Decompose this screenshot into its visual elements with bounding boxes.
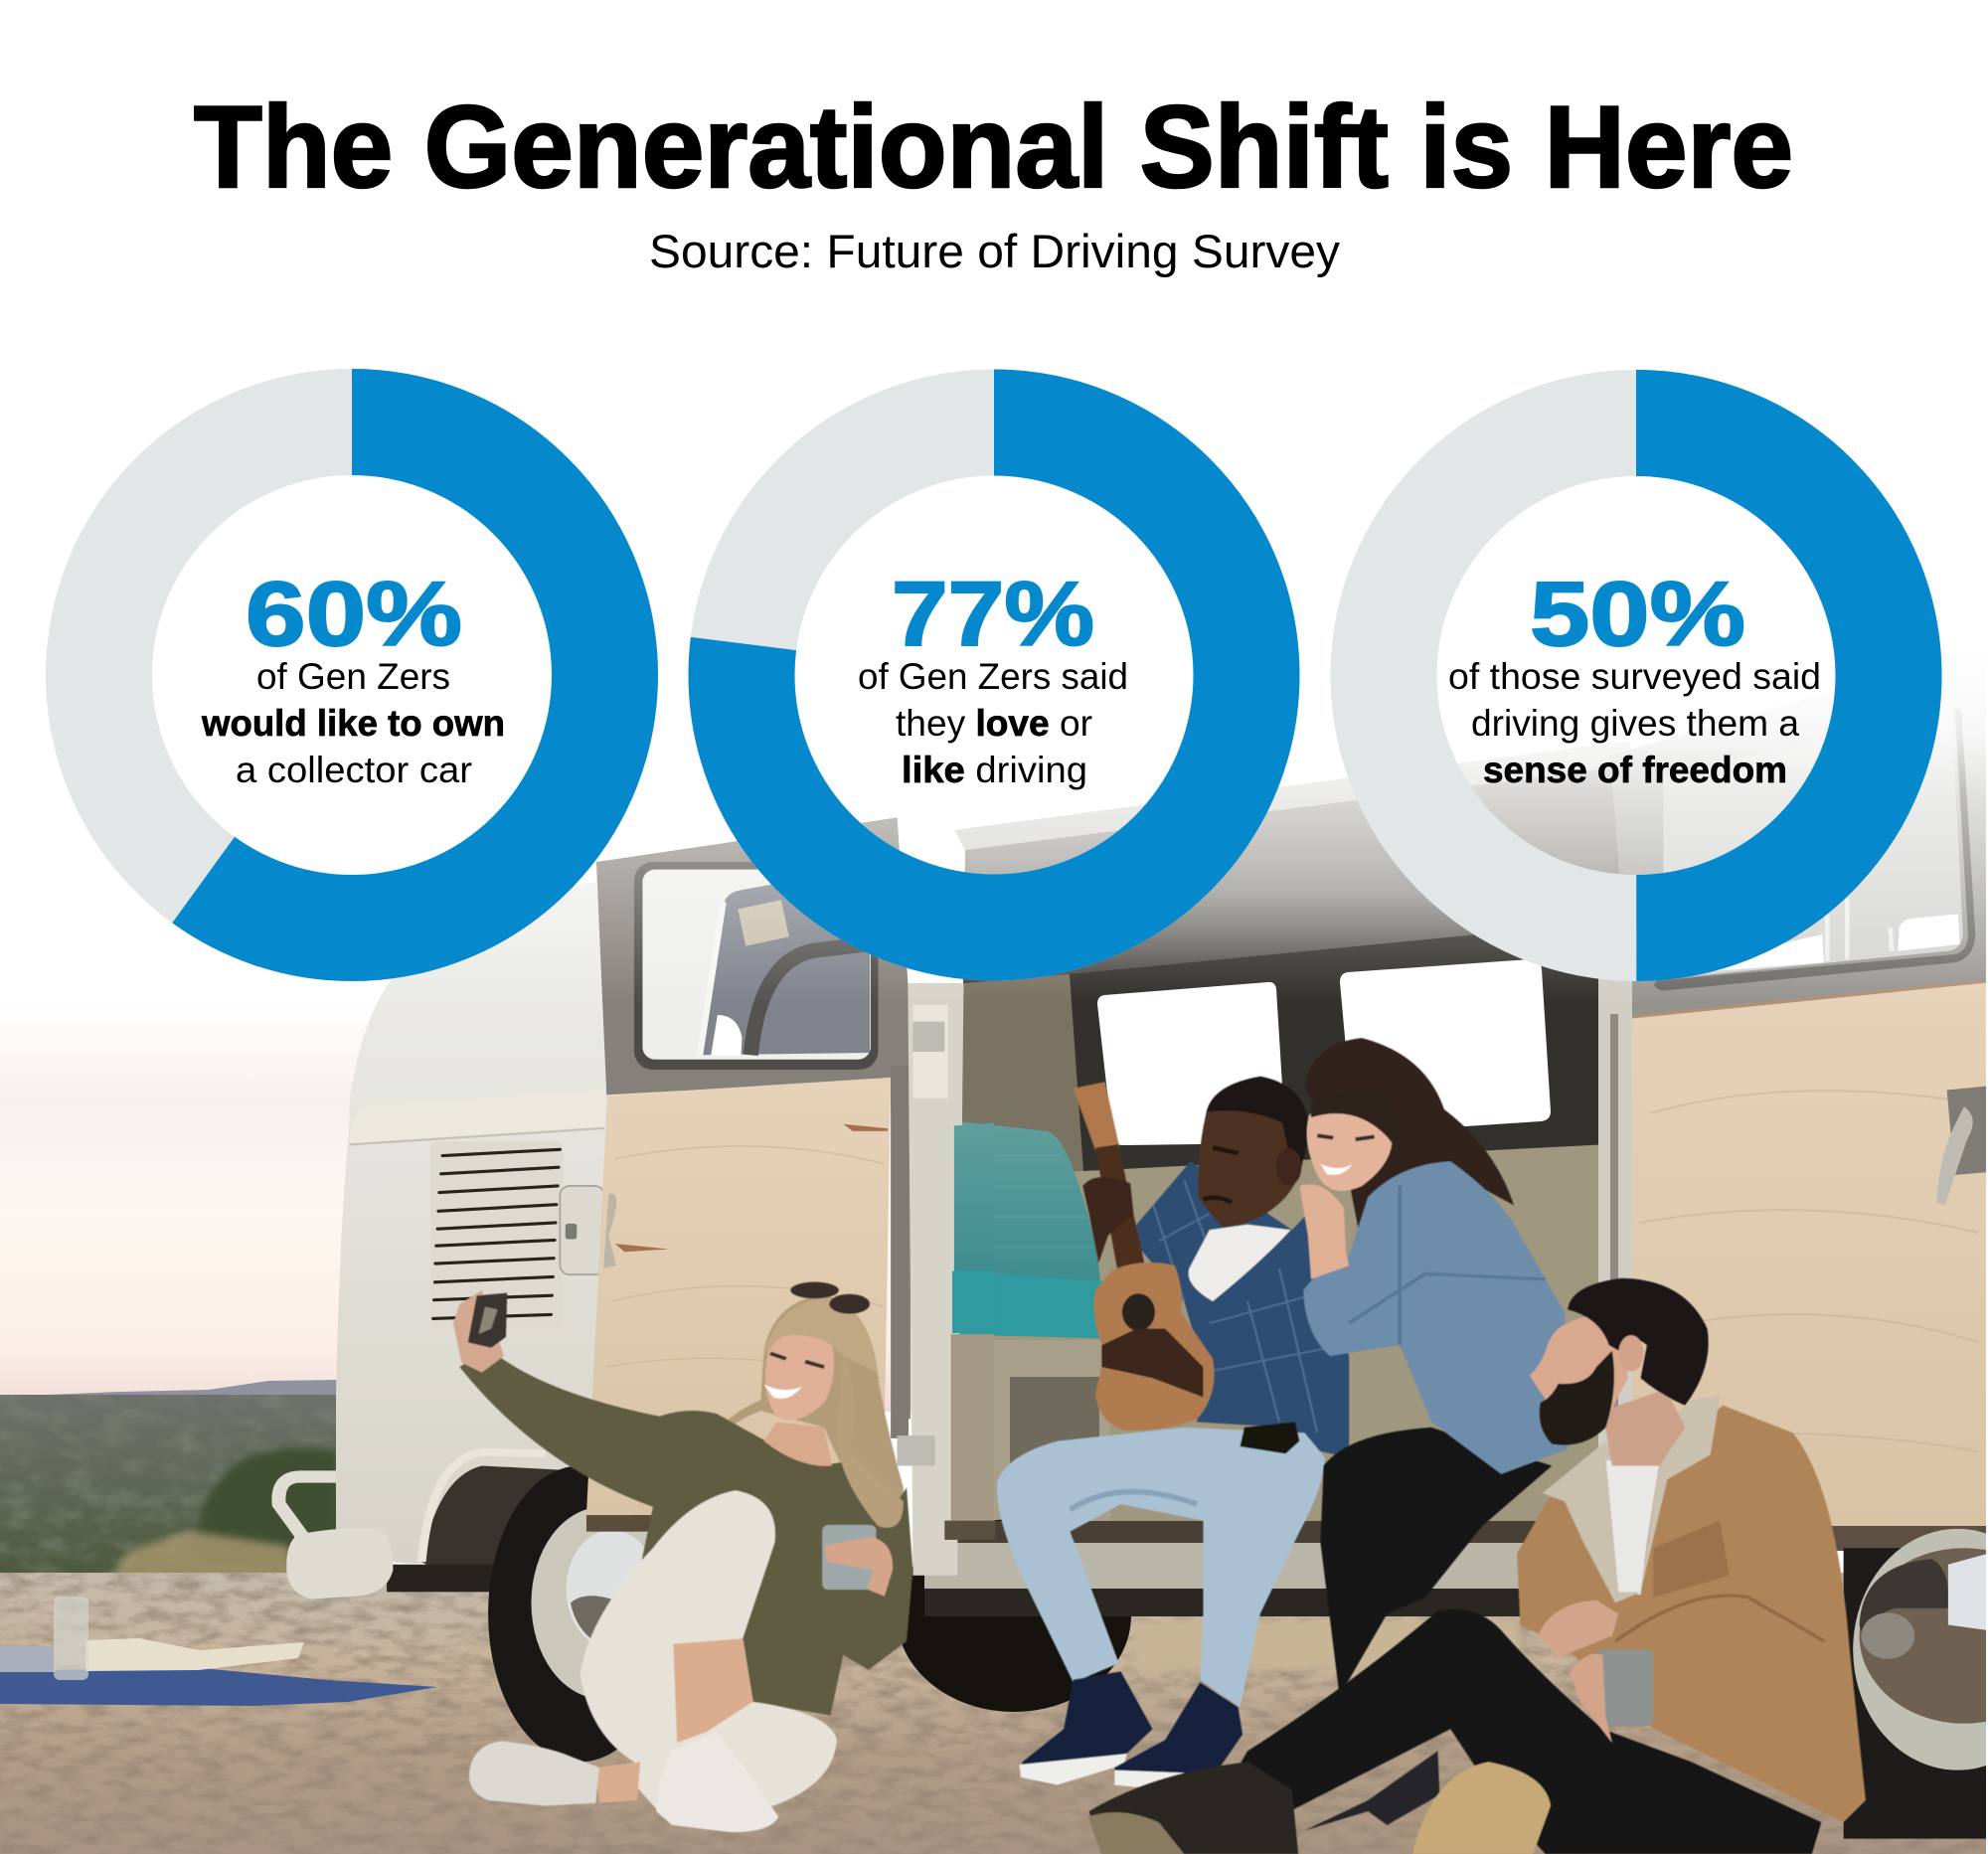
person: man with ukulele [997, 1077, 1349, 1791]
rear sliding door [1598, 646, 1988, 1551]
caption: would like to own a collector car [201, 656, 505, 790]
rear wheel [1844, 1529, 1988, 1839]
beard [1540, 1351, 1614, 1444]
caption: sense of freedom: of those surveyed said [1448, 656, 1821, 697]
hands [1082, 1177, 1133, 1263]
jeans [997, 1428, 1325, 1707]
front wheel [488, 1465, 673, 1762]
phone [1240, 1422, 1299, 1453]
landscape background [0, 636, 1988, 1854]
donut chart: 77% [742, 422, 1246, 927]
sherpa collar [1543, 1396, 1720, 1602]
raised hand and phone [453, 1290, 504, 1373]
neck [1602, 1389, 1685, 1465]
front door with window and plywood panel [586, 817, 911, 1532]
stat: 50%: 50% [1530, 564, 1745, 665]
black jeans [1235, 1609, 1821, 1854]
stat: 60%: 60% [246, 564, 462, 665]
trousers [580, 1490, 837, 1812]
plaid shirt [1133, 1161, 1349, 1457]
face [1307, 1108, 1393, 1191]
bare shin [673, 1638, 753, 1743]
person: bearded man in tan jacket [1087, 1278, 1866, 1854]
door pillar and hinges [897, 983, 995, 1576]
van interior [951, 741, 1630, 1551]
caption: sense of freedom: sense of freedom [1483, 750, 1787, 790]
person: woman taking a selfie [453, 1282, 912, 1832]
boots in foreground [1089, 1762, 1298, 1854]
caption: would like to own a collector car: would like to own [201, 703, 505, 744]
face [765, 1332, 834, 1420]
woman's sneaker [1305, 1751, 1439, 1830]
title: The Generational Shift is Here [194, 82, 1793, 212]
converse sneakers [1020, 1671, 1152, 1783]
face [1530, 1317, 1628, 1428]
caption: love or like driving [858, 656, 1128, 790]
white fade over top of photo [0, 636, 1988, 1004]
picnic blanket, towel and carafe [0, 1597, 437, 1706]
back hair [1305, 1038, 1514, 1247]
subtitle: source: Source: Future of Driving Survey [649, 225, 1341, 277]
person: woman in denim shirt [1299, 1038, 1568, 1696]
white t-shirt [1605, 1460, 1660, 1595]
glass and hand [822, 1525, 876, 1590]
caption: would like to own a collector car: a collector car [236, 750, 472, 790]
hair front [764, 1297, 878, 1373]
sunglasses [790, 1282, 870, 1314]
front body of the van with louvres [336, 880, 611, 1576]
sneakers [469, 1741, 599, 1806]
caption: love or like driving: they love or [896, 703, 1092, 744]
caption: would like to own a collector car: of Gen Zers [256, 656, 450, 697]
caption: love or like driving: of Gen Zers said [858, 656, 1128, 697]
white t-shirt [1189, 1225, 1290, 1301]
caption: sense of freedom: driving gives them a [1471, 703, 1799, 744]
ukulele [1074, 1082, 1119, 1150]
caption: sense of freedom [1448, 656, 1821, 790]
windows [1097, 982, 1285, 1145]
donut chart: 50% [1384, 423, 1889, 928]
door handle [1936, 1087, 1986, 1205]
head [1198, 1108, 1305, 1227]
donut chart: 60% [99, 421, 604, 928]
seat [951, 1121, 1104, 1338]
neck and chest [764, 1422, 832, 1466]
stat: 77%: 77% [892, 564, 1094, 665]
black trousers [1320, 1428, 1552, 1696]
photo: friends with camper van in a landscape [0, 636, 1988, 1854]
denim shirt [1303, 1161, 1568, 1474]
hands [1538, 1601, 1618, 1658]
caption: love or like driving: like driving [902, 750, 1087, 790]
hand on shoulder [1299, 1184, 1349, 1279]
hair back [701, 1294, 904, 1527]
bumper [278, 1476, 494, 1600]
sill and under-van shadow [897, 1519, 1541, 1712]
tan jacket [1517, 1406, 1866, 1822]
sweater [459, 1348, 912, 1715]
hair [1568, 1278, 1709, 1406]
door pillar [1598, 954, 1632, 1551]
